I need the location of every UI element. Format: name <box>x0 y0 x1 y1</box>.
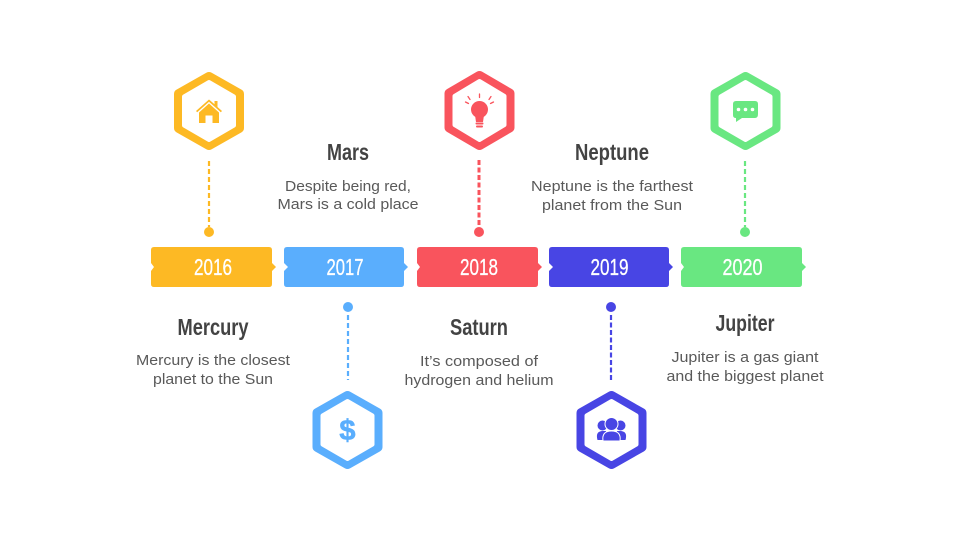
text: Jupiter <box>666 310 824 385</box>
text: Neptune <box>531 139 693 214</box>
milestone 2019: Neptune <box>531 139 693 464</box>
year tag 2020 <box>681 247 806 287</box>
text: Mercury: Mercury <box>178 314 249 340</box>
text: Saturn: It’s composed of <box>420 354 539 370</box>
year tag 2016 <box>151 247 276 287</box>
connector 2017 <box>343 302 353 380</box>
text: Mercury: Mercury is the closest <box>136 353 290 369</box>
connector 2019 <box>606 302 616 380</box>
connector 2020 <box>740 161 750 237</box>
year tag 2018 <box>417 247 542 287</box>
text: Jupiter: Jupiter <box>716 310 775 336</box>
milestone 2016: Mercury <box>136 77 290 388</box>
text: Neptune: planet from the Sun <box>542 198 682 214</box>
text: Jupiter: and the biggest planet <box>666 369 824 385</box>
text: Mars: Despite being red, <box>285 179 411 195</box>
icon: dollar in blue hexagon: $ <box>339 415 356 447</box>
text: Neptune: Neptune <box>575 139 649 165</box>
text: Saturn: Saturn <box>450 314 508 340</box>
milestone 2018: Saturn <box>404 76 554 389</box>
icon: light bulb in red hexagon <box>450 76 510 145</box>
milestone 2017: Mars <box>278 139 418 464</box>
year tag 2018: 2018 <box>460 254 498 280</box>
text: Neptune: Neptune is the farthest <box>531 179 693 195</box>
milestone 2020: Jupiter <box>666 77 824 385</box>
year tag 2017: 2017 <box>326 254 364 280</box>
year tag 2017 <box>284 247 408 287</box>
year tag 2019 <box>549 247 673 287</box>
text: Mars: Mars is a cold place <box>278 197 418 213</box>
year tag 2019: 2019 <box>590 254 628 280</box>
icon: chat bubble in green hexagon <box>716 77 776 145</box>
icon: people in indigo hexagon <box>582 396 642 464</box>
connector 2018 <box>474 160 484 237</box>
year tag 2020: 2020 <box>722 254 762 280</box>
text: Mars <box>278 139 418 213</box>
icon: house in yellow hexagon <box>179 77 239 145</box>
text: Saturn: hydrogen and helium <box>404 373 554 389</box>
connector 2016 <box>204 161 214 237</box>
text: Mercury <box>136 314 290 388</box>
text: Mars: Mars <box>327 139 369 165</box>
year tag 2016: 2016 <box>194 254 232 280</box>
text: Saturn <box>404 314 554 389</box>
text: Jupiter: Jupiter is a gas giant <box>672 350 818 366</box>
text: Mercury: planet to the Sun <box>153 372 273 388</box>
icon: dollar in blue hexagon <box>318 396 378 464</box>
